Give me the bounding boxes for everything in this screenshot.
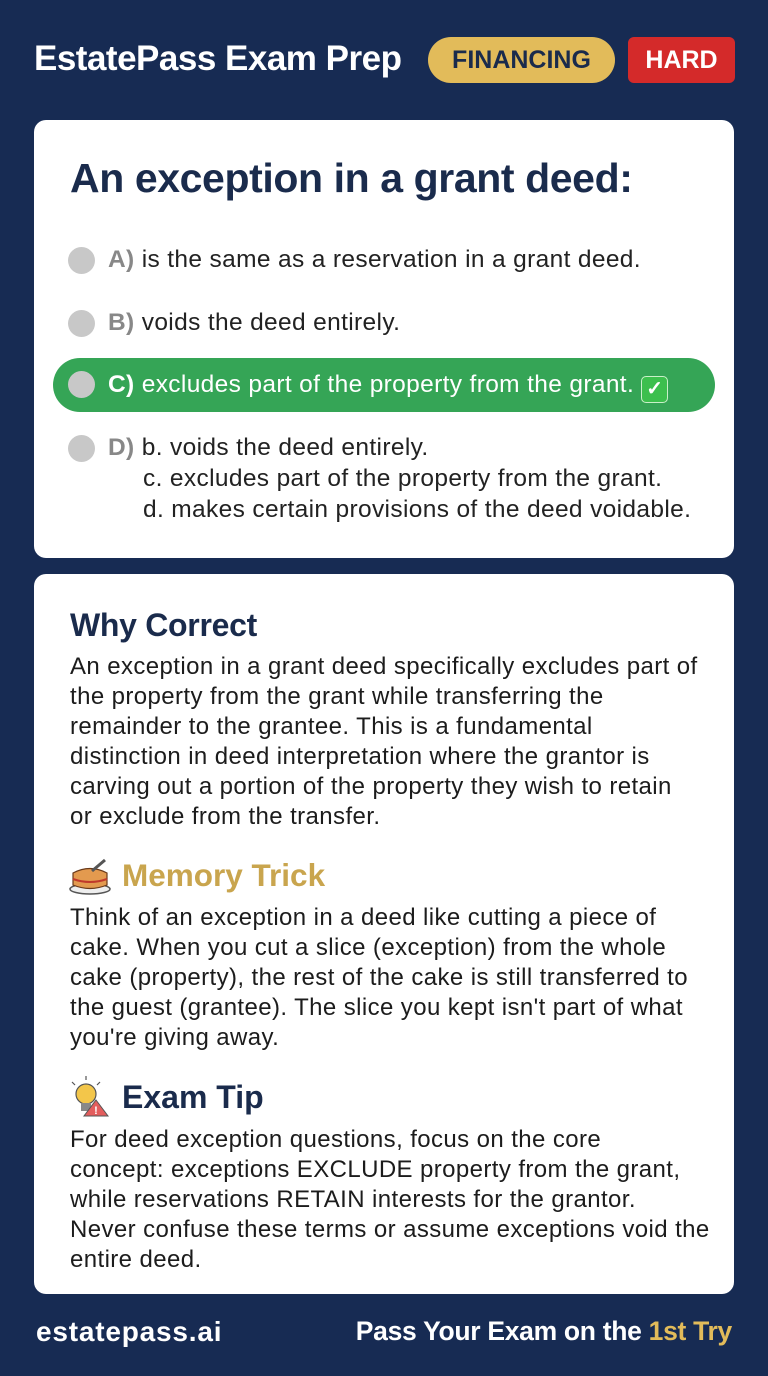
text: why correct <box>70 653 698 830</box>
text: why correct: remainder to the grantee. This is a fundamental <box>70 713 593 740</box>
text: exam tip: For deed exception questions, focus on the core <box>70 1126 601 1153</box>
option D: c. excludes part of the property from the grant. <box>143 465 662 492</box>
text: why correct: the property from the grant while transferring the <box>70 683 604 710</box>
title: EstatePass Exam Prep <box>34 39 401 78</box>
icon: cake <box>69 859 111 895</box>
option D: D) b. voids the deed entirely. <box>108 434 429 461</box>
heading: exam tip: Exam Tip <box>122 1079 264 1115</box>
text: memory trick: cake. When you cut a slice (exception) from the whole <box>70 934 666 961</box>
option C correct <box>53 358 715 412</box>
badge: financing: FINANCING <box>452 46 591 74</box>
text: memory trick: cake (property), the rest of the cake is still transferred to <box>70 964 688 991</box>
text: why correct: or exclude from the transfer. <box>70 803 380 830</box>
option B: B) voids the deed entirely. <box>108 309 400 336</box>
option A: A) is the same as a reservation in a grant deed. <box>108 246 641 273</box>
badge: hard <box>628 37 735 83</box>
text: exam tip: entire deed. <box>70 1246 202 1273</box>
heading: why correct: Why Correct <box>70 607 257 643</box>
option D: d. makes certain provisions of the deed voidable. <box>143 496 691 523</box>
footer: tagline: Pass Your Exam on the 1st Try <box>356 1316 732 1346</box>
text: exam tip: while reservations RETAIN interests for the grantor. <box>70 1186 636 1213</box>
icon: lightbulb: ! <box>94 1105 98 1117</box>
heading: memory trick: Memory Trick <box>122 857 325 893</box>
heading: exam tip <box>72 1076 264 1117</box>
badge: financing <box>428 37 615 83</box>
text: why correct: An exception in a grant deed specifically excludes part of <box>70 653 698 680</box>
question heading: An exception in a grant deed: <box>70 155 632 201</box>
text: why correct: distinction in deed interpretation where the grantor is <box>70 743 650 770</box>
text: why correct: carving out a portion of the property they wish to retain <box>70 773 672 800</box>
footer: site: estatepass.ai <box>36 1316 222 1347</box>
option D <box>68 434 691 523</box>
badge: hard: HARD <box>645 46 718 74</box>
text: memory trick: Think of an exception in a deed like cutting a piece of <box>70 904 656 931</box>
panel: question <box>34 120 734 558</box>
option C correct: ✓ <box>646 378 663 400</box>
text: exam tip: concept: exceptions EXCLUDE property from the grant, <box>70 1156 680 1183</box>
option C correct: C) excludes part of the property from the grant. <box>108 371 634 398</box>
icon: lightbulb <box>72 1076 109 1117</box>
text: exam tip: Never confuse these terms or assume exceptions void the <box>70 1216 710 1243</box>
text: exam tip <box>70 1126 710 1273</box>
text: memory trick <box>70 904 688 1051</box>
panel: explanation <box>34 574 734 1294</box>
text: memory trick: you're giving away. <box>70 1024 279 1051</box>
text: memory trick: the guest (grantee). The slice you kept isn't part of what <box>70 994 683 1021</box>
